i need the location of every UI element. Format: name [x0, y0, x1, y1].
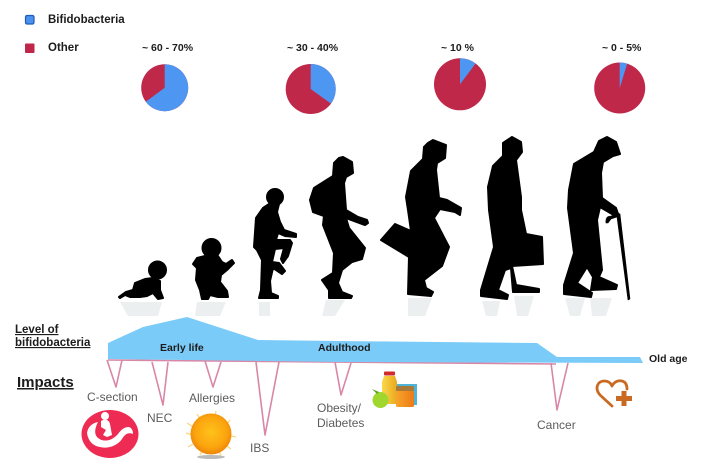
band label: Early life: Early life	[160, 342, 204, 354]
silhouette: elderly person with cane	[564, 137, 630, 300]
pie chart: 10 percent	[434, 42, 486, 110]
silhouette: toddler	[193, 239, 234, 299]
silhouette: older adult with briefcase	[481, 137, 543, 299]
bifidobacteria level band	[108, 317, 643, 363]
label: Obesity/Diabetes: Diabetes	[317, 416, 364, 430]
icon: C-section mother and baby	[82, 410, 138, 458]
pie label: ~ 60 - 70%	[142, 42, 194, 54]
heading: level of bifidobacteria	[15, 324, 91, 349]
legend label: Other: Other	[48, 42, 79, 54]
silhouette: child	[254, 189, 296, 298]
cane	[606, 213, 630, 300]
label: Allergies: Allergies	[189, 391, 235, 405]
band label: Adulthood: Adulthood	[318, 342, 370, 354]
label: C-section: C-section	[87, 390, 138, 404]
impact spikes	[107, 360, 568, 435]
pie label: ~ 30 - 40%	[287, 42, 339, 54]
legend swatch: Bifidobacteria	[26, 16, 34, 24]
label: Cancer: Cancer	[537, 418, 576, 432]
icon: sun	[186, 411, 236, 459]
heading: level of bifidobacteria: Level of	[15, 324, 59, 336]
icon: heart with plus	[597, 381, 632, 406]
label: NEC: NEC	[147, 411, 173, 425]
icon: processed food and drink	[372, 372, 417, 408]
label: Obesity/Diabetes: Obesity/	[317, 401, 362, 415]
pie label: ~ 0 - 5%	[602, 42, 642, 54]
legend	[25, 14, 125, 54]
silhouette: adult with briefcase	[381, 140, 461, 296]
legend label: Bifidobacteria: Bifidobacteria	[48, 14, 125, 26]
band label: Old age: Old age	[649, 353, 688, 365]
heading: impacts: Impacts	[17, 374, 74, 391]
legend swatch: Other	[25, 44, 34, 53]
pie chart: 60-70 percent	[141, 42, 194, 111]
label: IBS: IBS	[250, 441, 269, 455]
silhouette: crawling baby	[119, 262, 166, 299]
pie chart: 30-40 percent	[286, 42, 339, 114]
silhouette: teen with backpack	[310, 157, 368, 298]
pie label: ~ 10 %	[441, 42, 475, 54]
pie chart: 0-5 percent	[594, 42, 645, 114]
label: Obesity/Diabetes	[317, 401, 364, 430]
floor reflections	[120, 296, 612, 316]
heading: level of bifidobacteria: bifidobacteria	[15, 337, 91, 349]
